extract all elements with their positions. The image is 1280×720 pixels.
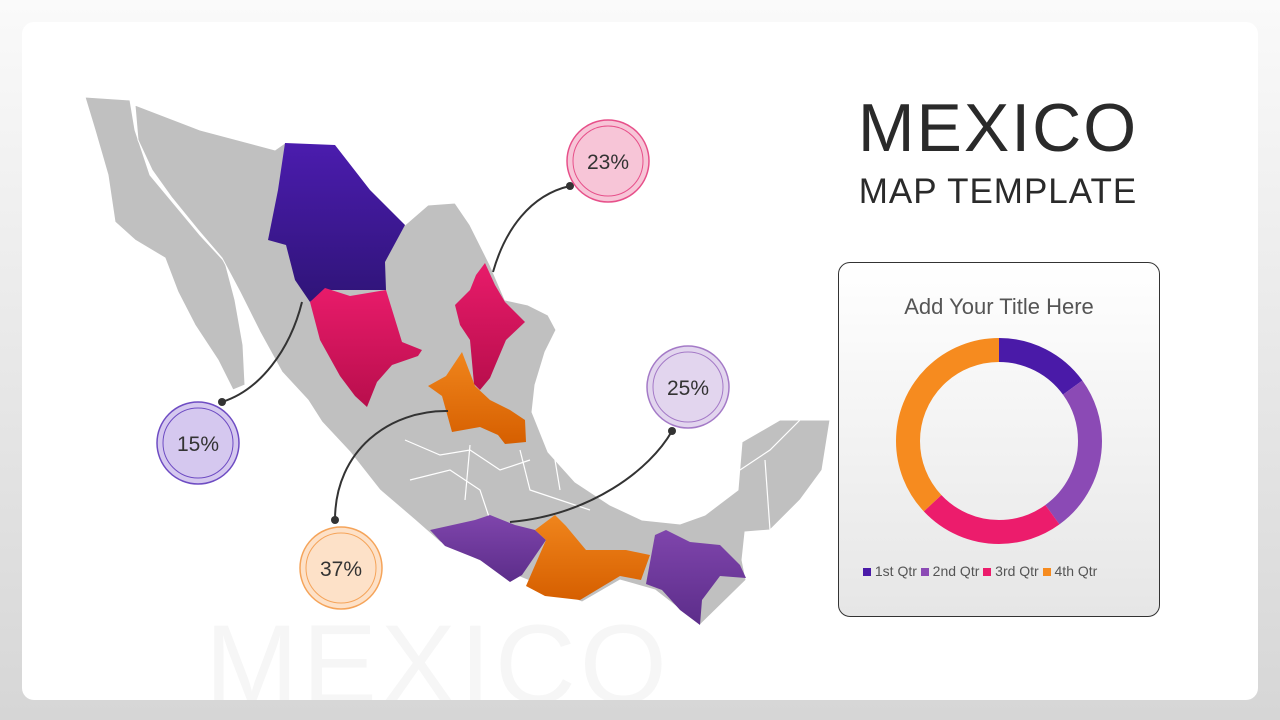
subtitle: MAP TEMPLATE [859,172,1137,211]
callout 23% [567,120,649,202]
map: gray base [85,97,830,625]
chart card [838,262,1160,617]
chart title: Add Your Title Here [904,294,1094,319]
state: San Luis Potosi [428,352,526,444]
callout 25% [647,346,729,428]
state: Guerrero [430,515,546,582]
callout 25%: 25% [667,377,709,400]
title: MEXICO [858,90,1138,166]
state: Chiapas [646,530,746,625]
callout 15%: 15% [177,433,219,456]
state: Oaxaca [526,515,650,600]
connector lines [222,186,672,522]
state: Durango [310,288,422,407]
callout 23%: 23% [587,151,629,174]
state: Nuevo Leon [455,263,525,390]
legend: 1st Qtr 2nd Qtr 3rd Qtr 4th Qtr [875,563,1097,579]
callout 37%: 37% [320,558,362,581]
map: state borders [405,420,800,530]
callout 15% [157,402,239,484]
state: Chihuahua [268,143,405,302]
donut chart [896,338,1102,544]
callout 37% [300,527,382,609]
